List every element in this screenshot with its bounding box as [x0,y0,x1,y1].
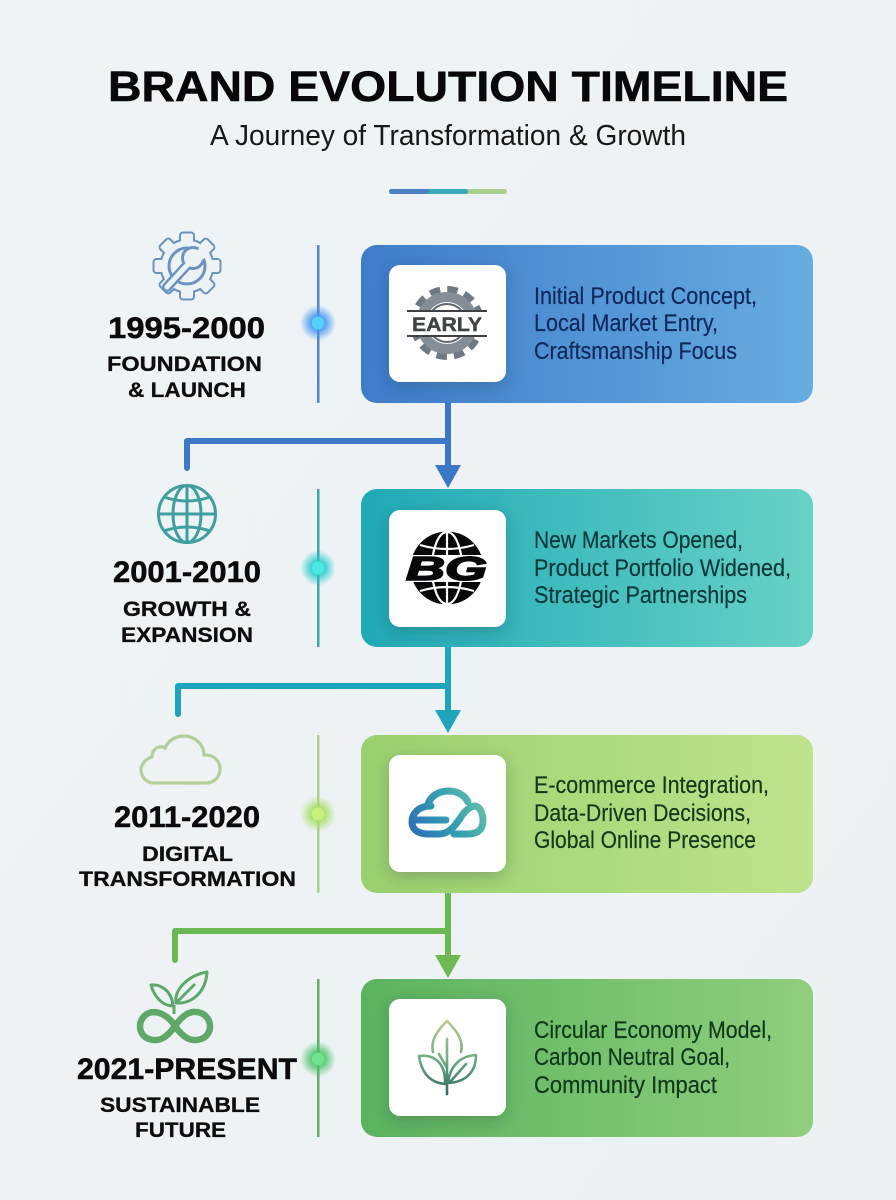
milestones text: New Markets Opened, [534,527,743,554]
era 1: foundation and launch [107,234,813,403]
milestones text [534,1017,772,1099]
panel: growth milestones [361,489,813,647]
timeline node [300,489,336,647]
logo tile: early gear: EARLY [412,315,482,336]
timeline node [300,245,336,403]
year: 2001-2010: 2001-2010 [113,556,261,589]
connector arrow: foundation to growth [187,402,461,488]
title: BRAND EVOLUTION TIMELINE [108,63,788,111]
milestones text [534,772,769,854]
milestones text: Circular Economy Model, [534,1017,772,1044]
logo tile: BG globe [389,510,506,627]
milestones text [534,527,791,609]
milestones text: Community Impact [534,1072,717,1099]
milestones text: Carbon Neutral Goal, [534,1044,730,1071]
panel: sustainable milestones [361,979,813,1137]
label: foundation and launch: FOUNDATION [107,352,262,376]
label: growth and expansion: EXPANSION [121,623,253,647]
milestones text: E-commerce Integration, [534,772,769,799]
title divider [389,189,507,194]
logo tile: cloud infinity [389,755,506,872]
milestones text: Data-Driven Decisions, [534,800,751,827]
panel: early milestones [361,245,813,403]
connector arrow: digital to sustainable [175,892,461,978]
year: 2021-present: 2021-PRESENT [77,1053,297,1086]
label: foundation and launch: & LAUNCH [128,378,246,402]
timeline node [300,735,336,893]
icon: globe [158,486,216,542]
year: 2011-2020: 2011-2020 [114,801,260,834]
icon: gear with wrench [154,234,220,298]
label: digital transformation: TRANSFORMATION [79,867,296,891]
subtitle: A Journey of Transformation & Growth [210,120,686,152]
label: growth and expansion: GROWTH & [123,597,251,621]
milestones text: Strategic Partnerships [534,582,747,609]
icon: sprout and infinity loop [140,972,210,1040]
label: sustainable future [100,1093,260,1142]
milestones text: Product Portfolio Widened, [534,555,791,582]
milestones text: Global Online Presence [534,827,756,854]
panel: digital milestones [361,735,813,893]
logo tile: leaf [389,999,506,1116]
label: digital transformation: DIGITAL [142,842,233,866]
milestones text: Craftsmanship Focus [534,338,737,365]
timeline node [300,979,336,1137]
label: sustainable future: FUTURE [135,1118,226,1142]
logo tile: early gear [389,265,506,382]
label: growth and expansion [121,597,253,647]
milestones text: Local Market Entry, [534,310,718,337]
label: sustainable future: SUSTAINABLE [100,1093,260,1117]
label: digital transformation [79,842,296,891]
milestones text [534,283,757,365]
milestones text: Initial Product Concept, [534,283,757,310]
era 4: sustainable future [77,972,813,1142]
label: foundation and launch [107,352,262,402]
icon: cloud [141,736,220,783]
era 2: growth and expansion [113,486,813,647]
era 3: digital transformation [79,735,813,893]
logo tile: BG globe: BG [406,550,487,587]
year: 1995-2000: 1995-2000 [108,312,265,345]
connector arrow: growth to digital [178,647,461,733]
